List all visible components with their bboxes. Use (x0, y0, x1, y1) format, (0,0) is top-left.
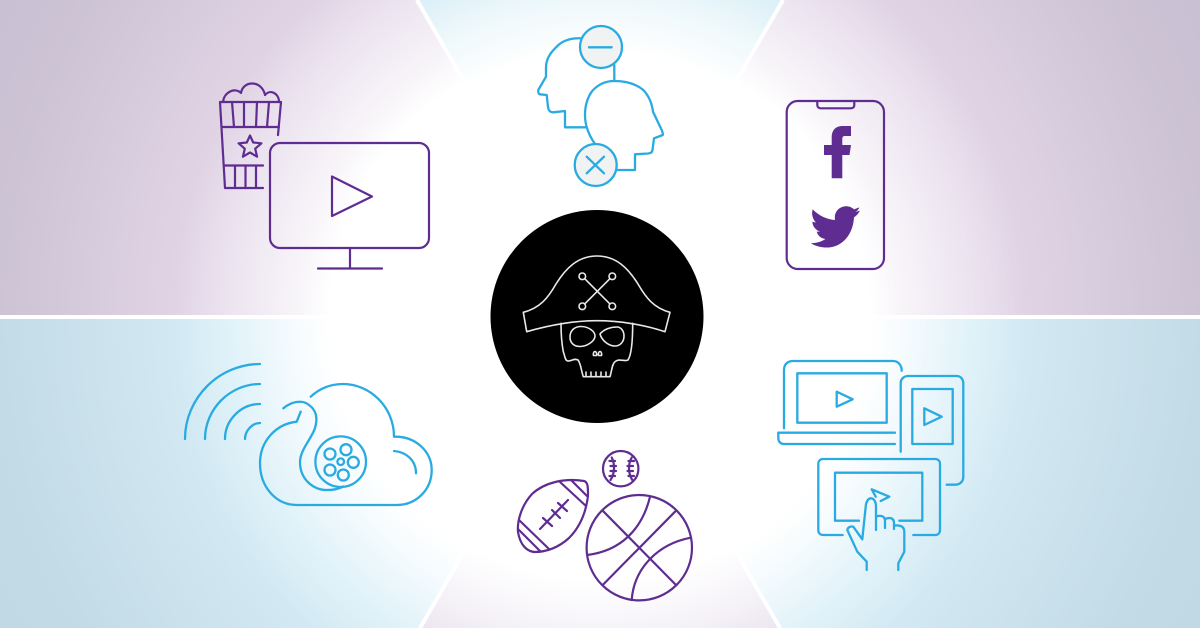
icon: two heads in disagreement (538, 26, 663, 186)
baseball (603, 451, 638, 486)
cross badge (575, 144, 617, 186)
icon: popcorn and streaming monitor (220, 83, 429, 268)
minus badge (580, 26, 622, 68)
icon: multi-device video (778, 361, 963, 570)
basketball (587, 495, 692, 600)
popcorn box (220, 83, 281, 188)
monitor (270, 143, 429, 268)
icon: phone with social logos (787, 101, 884, 269)
film reel (315, 436, 366, 487)
laptop (778, 361, 902, 444)
wireless arcs (185, 364, 260, 439)
skull (561, 323, 633, 377)
cloud outline (260, 384, 432, 505)
twitter logo (811, 206, 860, 247)
center badge: pirate skull (490, 210, 704, 423)
icon: sports balls (518, 451, 692, 600)
icon: cloud streaming with film reel (185, 364, 432, 505)
football (518, 480, 588, 552)
crossbones (579, 273, 616, 310)
touch device (818, 459, 940, 535)
pirate hat (523, 256, 670, 332)
tablet (901, 376, 963, 485)
facebook logo (824, 126, 851, 178)
pointing hand (847, 498, 904, 570)
